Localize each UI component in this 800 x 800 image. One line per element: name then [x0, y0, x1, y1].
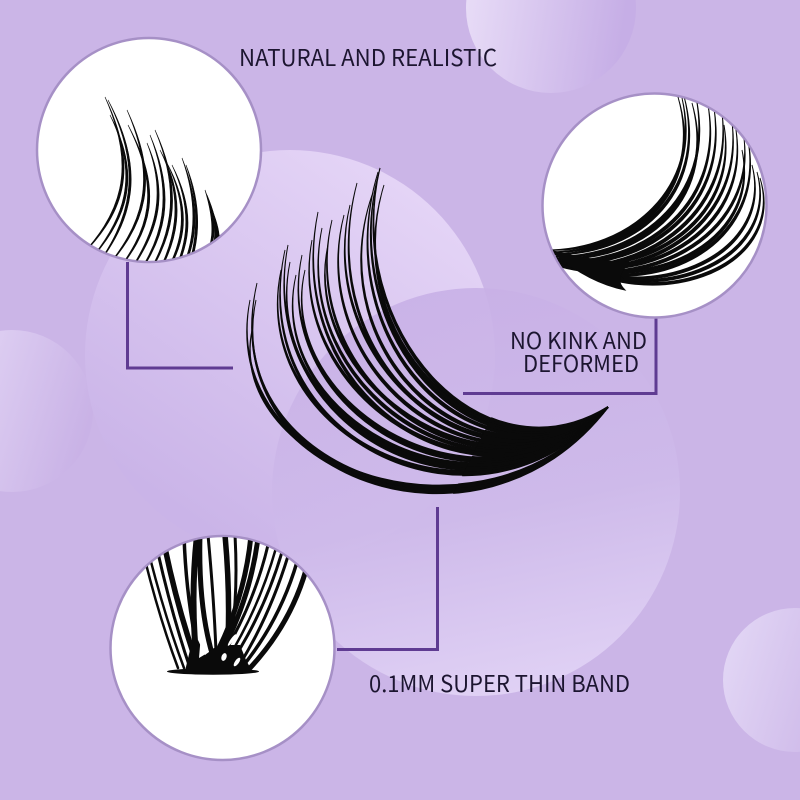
connector: top left circle to lash: [128, 262, 233, 368]
band: [167, 668, 259, 675]
label: no kink and deformed: NO KINK AND: [510, 322, 647, 356]
connector: top right circle to lash: [463, 318, 656, 394]
label: no kink and deformed: DEFORMED: [523, 345, 639, 379]
connector: bottom circle to lash: [337, 507, 438, 650]
central lash cluster: [247, 168, 608, 494]
inset circle: thin band: [110, 535, 334, 760]
inset circle: no kink curve: [542, 94, 766, 318]
inset circle: natural lash tips: [37, 38, 261, 290]
label: natural and realistic: NATURAL AND REALISTIC: [239, 39, 497, 73]
label: thin band: 0.1MM SUPER THIN BAND: [369, 665, 630, 699]
gaps between crossing strands: [199, 633, 242, 667]
label: no kink and deformed: [510, 322, 647, 379]
